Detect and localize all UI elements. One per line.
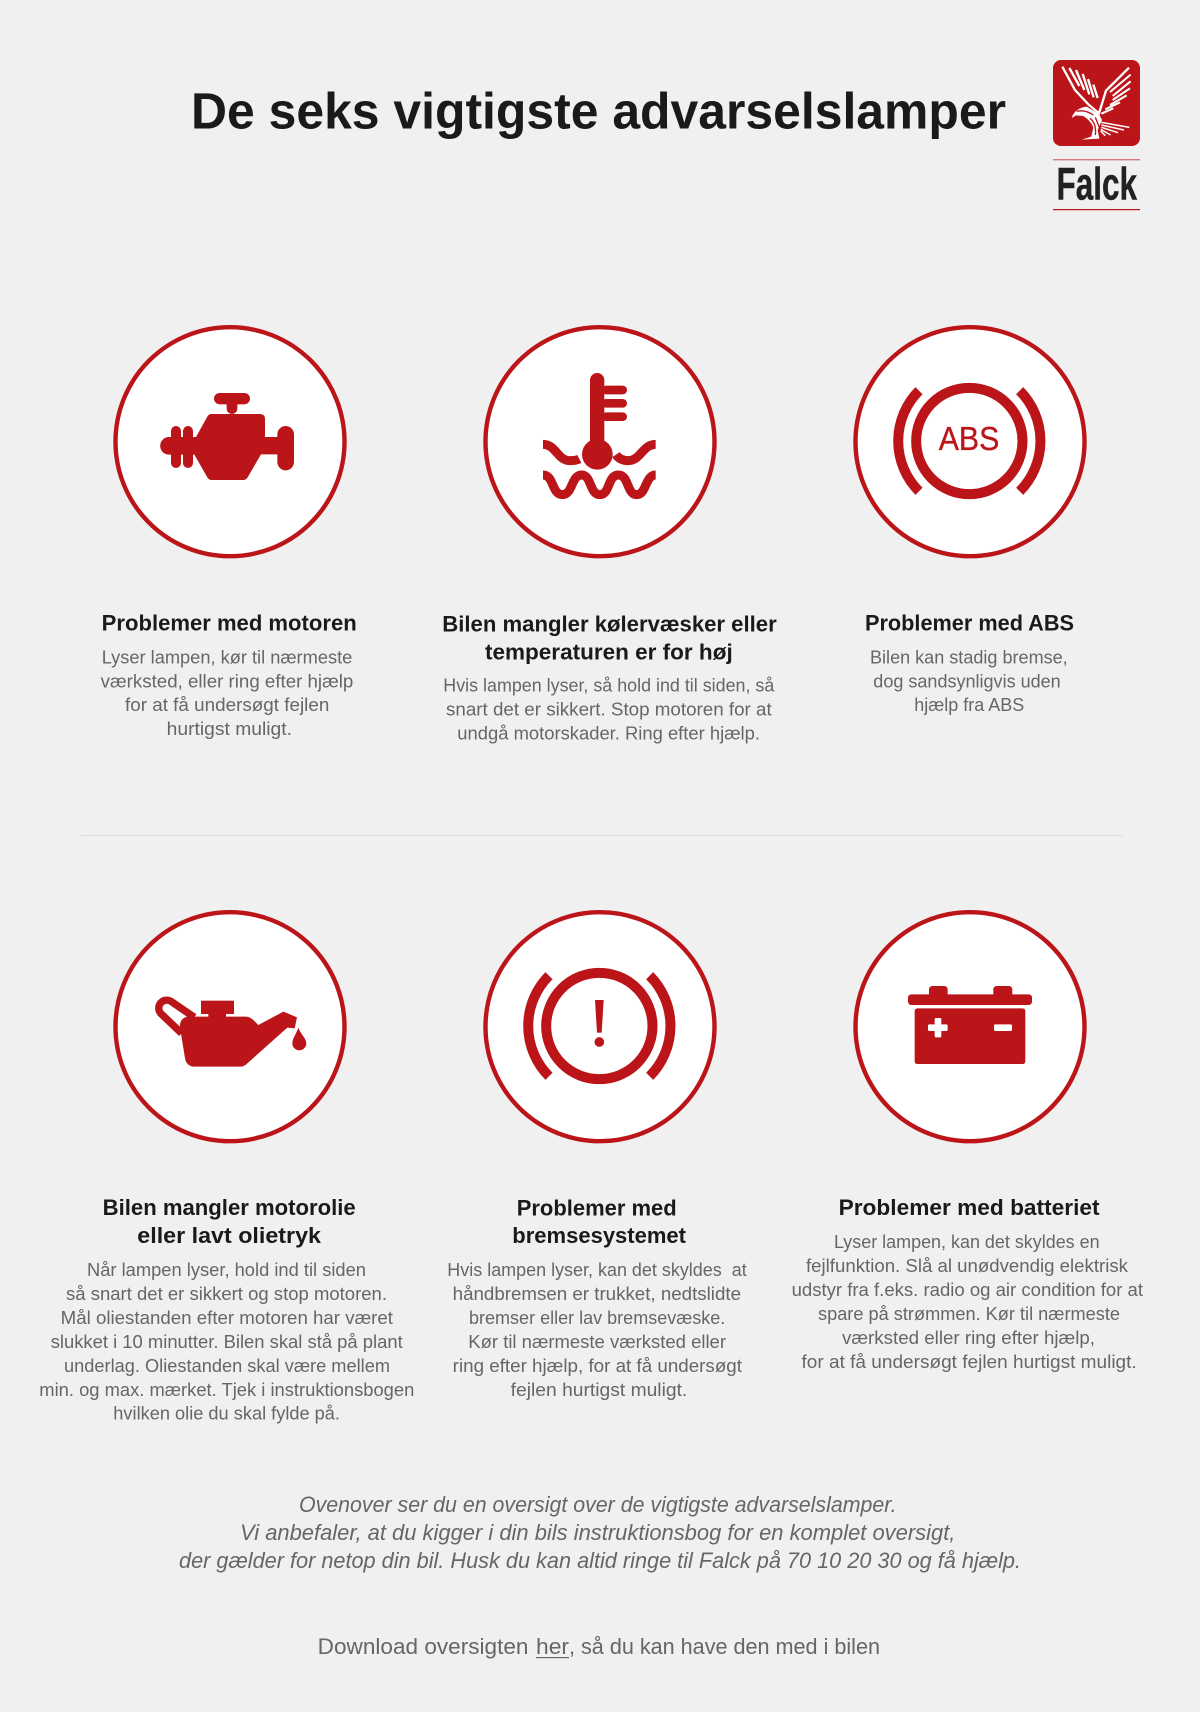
download line: Download oversigten (318, 1634, 528, 1659)
icon: oil can (116, 912, 344, 1141)
body text: så snart det er sikkert og stop motoren. (66, 1283, 387, 1304)
heading: Bilen mangler motorolie (103, 1195, 356, 1220)
body text: håndbremsen er trukket, nedtslidte (453, 1283, 741, 1304)
download line (318, 1634, 880, 1659)
heading: bremsesystemet (512, 1223, 687, 1248)
footer note: der gælder for netop din bil. Husk du kan altid ringe til Falck på 70 10 20 30 og få hjælp. (179, 1548, 1021, 1573)
panel: ABS (856, 327, 1084, 715)
body text: fejlfunktion. Slå al unødvendig elektrisk (806, 1255, 1129, 1276)
body text: underlag. Oliestanden skal være mellem (64, 1355, 390, 1376)
body text: for at få undersøgt fejlen (125, 694, 329, 715)
body text: slukket i 10 minutter. Bilen skal stå på plant (51, 1331, 403, 1352)
icon: ABS lamp: ABS (939, 420, 999, 457)
panel: motor (101, 327, 357, 739)
body text: Mål oliestanden efter motoren har været (61, 1307, 393, 1328)
panel: batteri (792, 912, 1143, 1372)
body text: snart det er sikkert. Stop motoren for at (446, 699, 772, 720)
body text: Hvis lampen lyser, så hold ind til siden, så (443, 675, 775, 696)
heading: Problemer med (517, 1196, 677, 1220)
title: De seks vigtigste advarselslamper (191, 82, 1006, 140)
body text: dog sandsynligvis uden (873, 670, 1061, 691)
body text: Bilen kan stadig bremse, (870, 646, 1068, 667)
panel: bremser (447, 912, 747, 1400)
body text: undgå motorskader. Ring efter hjælp. (457, 722, 760, 743)
body text: værksted, eller ring efter hjælp (101, 670, 353, 691)
icon: engine (116, 327, 344, 556)
body text (39, 1259, 414, 1424)
body text: bremser eller lav bremsevæske. (469, 1307, 725, 1328)
body text (447, 1259, 747, 1400)
download line: , så du kan have den med i bilen (569, 1634, 880, 1659)
panel: kølervæske (442, 327, 777, 743)
body text: hjælp fra ABS (914, 694, 1024, 715)
logo wordmark: Falck (1056, 158, 1138, 210)
body text: Lyser lampen, kør til nærmeste (102, 646, 352, 667)
panel: motorolie (39, 912, 414, 1424)
logo: Falck (1053, 60, 1140, 210)
heading (442, 612, 777, 664)
heading (512, 1196, 687, 1248)
body text: for at få undersøgt fejlen hurtigst muligt. (802, 1351, 1137, 1372)
heading: Problemer med motoren (102, 611, 357, 636)
icon: battery (856, 912, 1084, 1141)
icon: brake lamp (486, 912, 714, 1141)
logo bottom rule (1053, 209, 1140, 210)
body text (101, 646, 353, 739)
icon: ABS lamp (856, 327, 1084, 556)
icon: eagle badge (1053, 60, 1140, 146)
body text: værksted eller ring efter hjælp, (842, 1327, 1095, 1348)
heading: Problemer med batteriet (839, 1195, 1100, 1220)
body text: ring efter hjælp, for at få undersøgt (453, 1355, 742, 1376)
footer note (179, 1492, 1021, 1573)
logo top rule (1053, 159, 1140, 160)
icon: coolant thermometer (486, 327, 714, 556)
body text: hurtigst muligt. (167, 718, 292, 739)
download line: her (536, 1634, 569, 1659)
body text: hvilken olie du skal fylde på. (113, 1402, 340, 1424)
body text: Lyser lampen, kan det skyldes en (834, 1231, 1100, 1252)
heading: Problemer med ABS (865, 611, 1074, 636)
body text: spare på strømmen. Kør til nærmeste (818, 1303, 1120, 1324)
heading: Bilen mangler kølervæsker eller (442, 612, 777, 637)
heading (103, 1195, 356, 1248)
heading: eller lavt olietryk (137, 1223, 322, 1248)
footer note: Vi anbefaler, at du kigger i din bils instruktionsbog for en komplet oversigt, (240, 1520, 955, 1545)
body text: Når lampen lyser, hold ind til siden (87, 1259, 366, 1280)
body text: Hvis lampen lyser, kan det skyldes at (447, 1259, 747, 1280)
body text: Kør til nærmeste værksted eller (468, 1331, 726, 1352)
body text (792, 1231, 1143, 1372)
footer note: Ovenover ser du en oversigt over de vigtigste advarselslamper. (299, 1492, 896, 1517)
body text (443, 675, 775, 743)
body text: fejlen hurtigst muligt. (511, 1379, 687, 1400)
heading: temperaturen er for høj (485, 639, 733, 664)
body text (870, 646, 1068, 715)
body text: udstyr fra f.eks. radio og air condition for at (792, 1279, 1143, 1300)
body text: min. og max. mærket. Tjek i instruktionsbogen (39, 1379, 414, 1400)
